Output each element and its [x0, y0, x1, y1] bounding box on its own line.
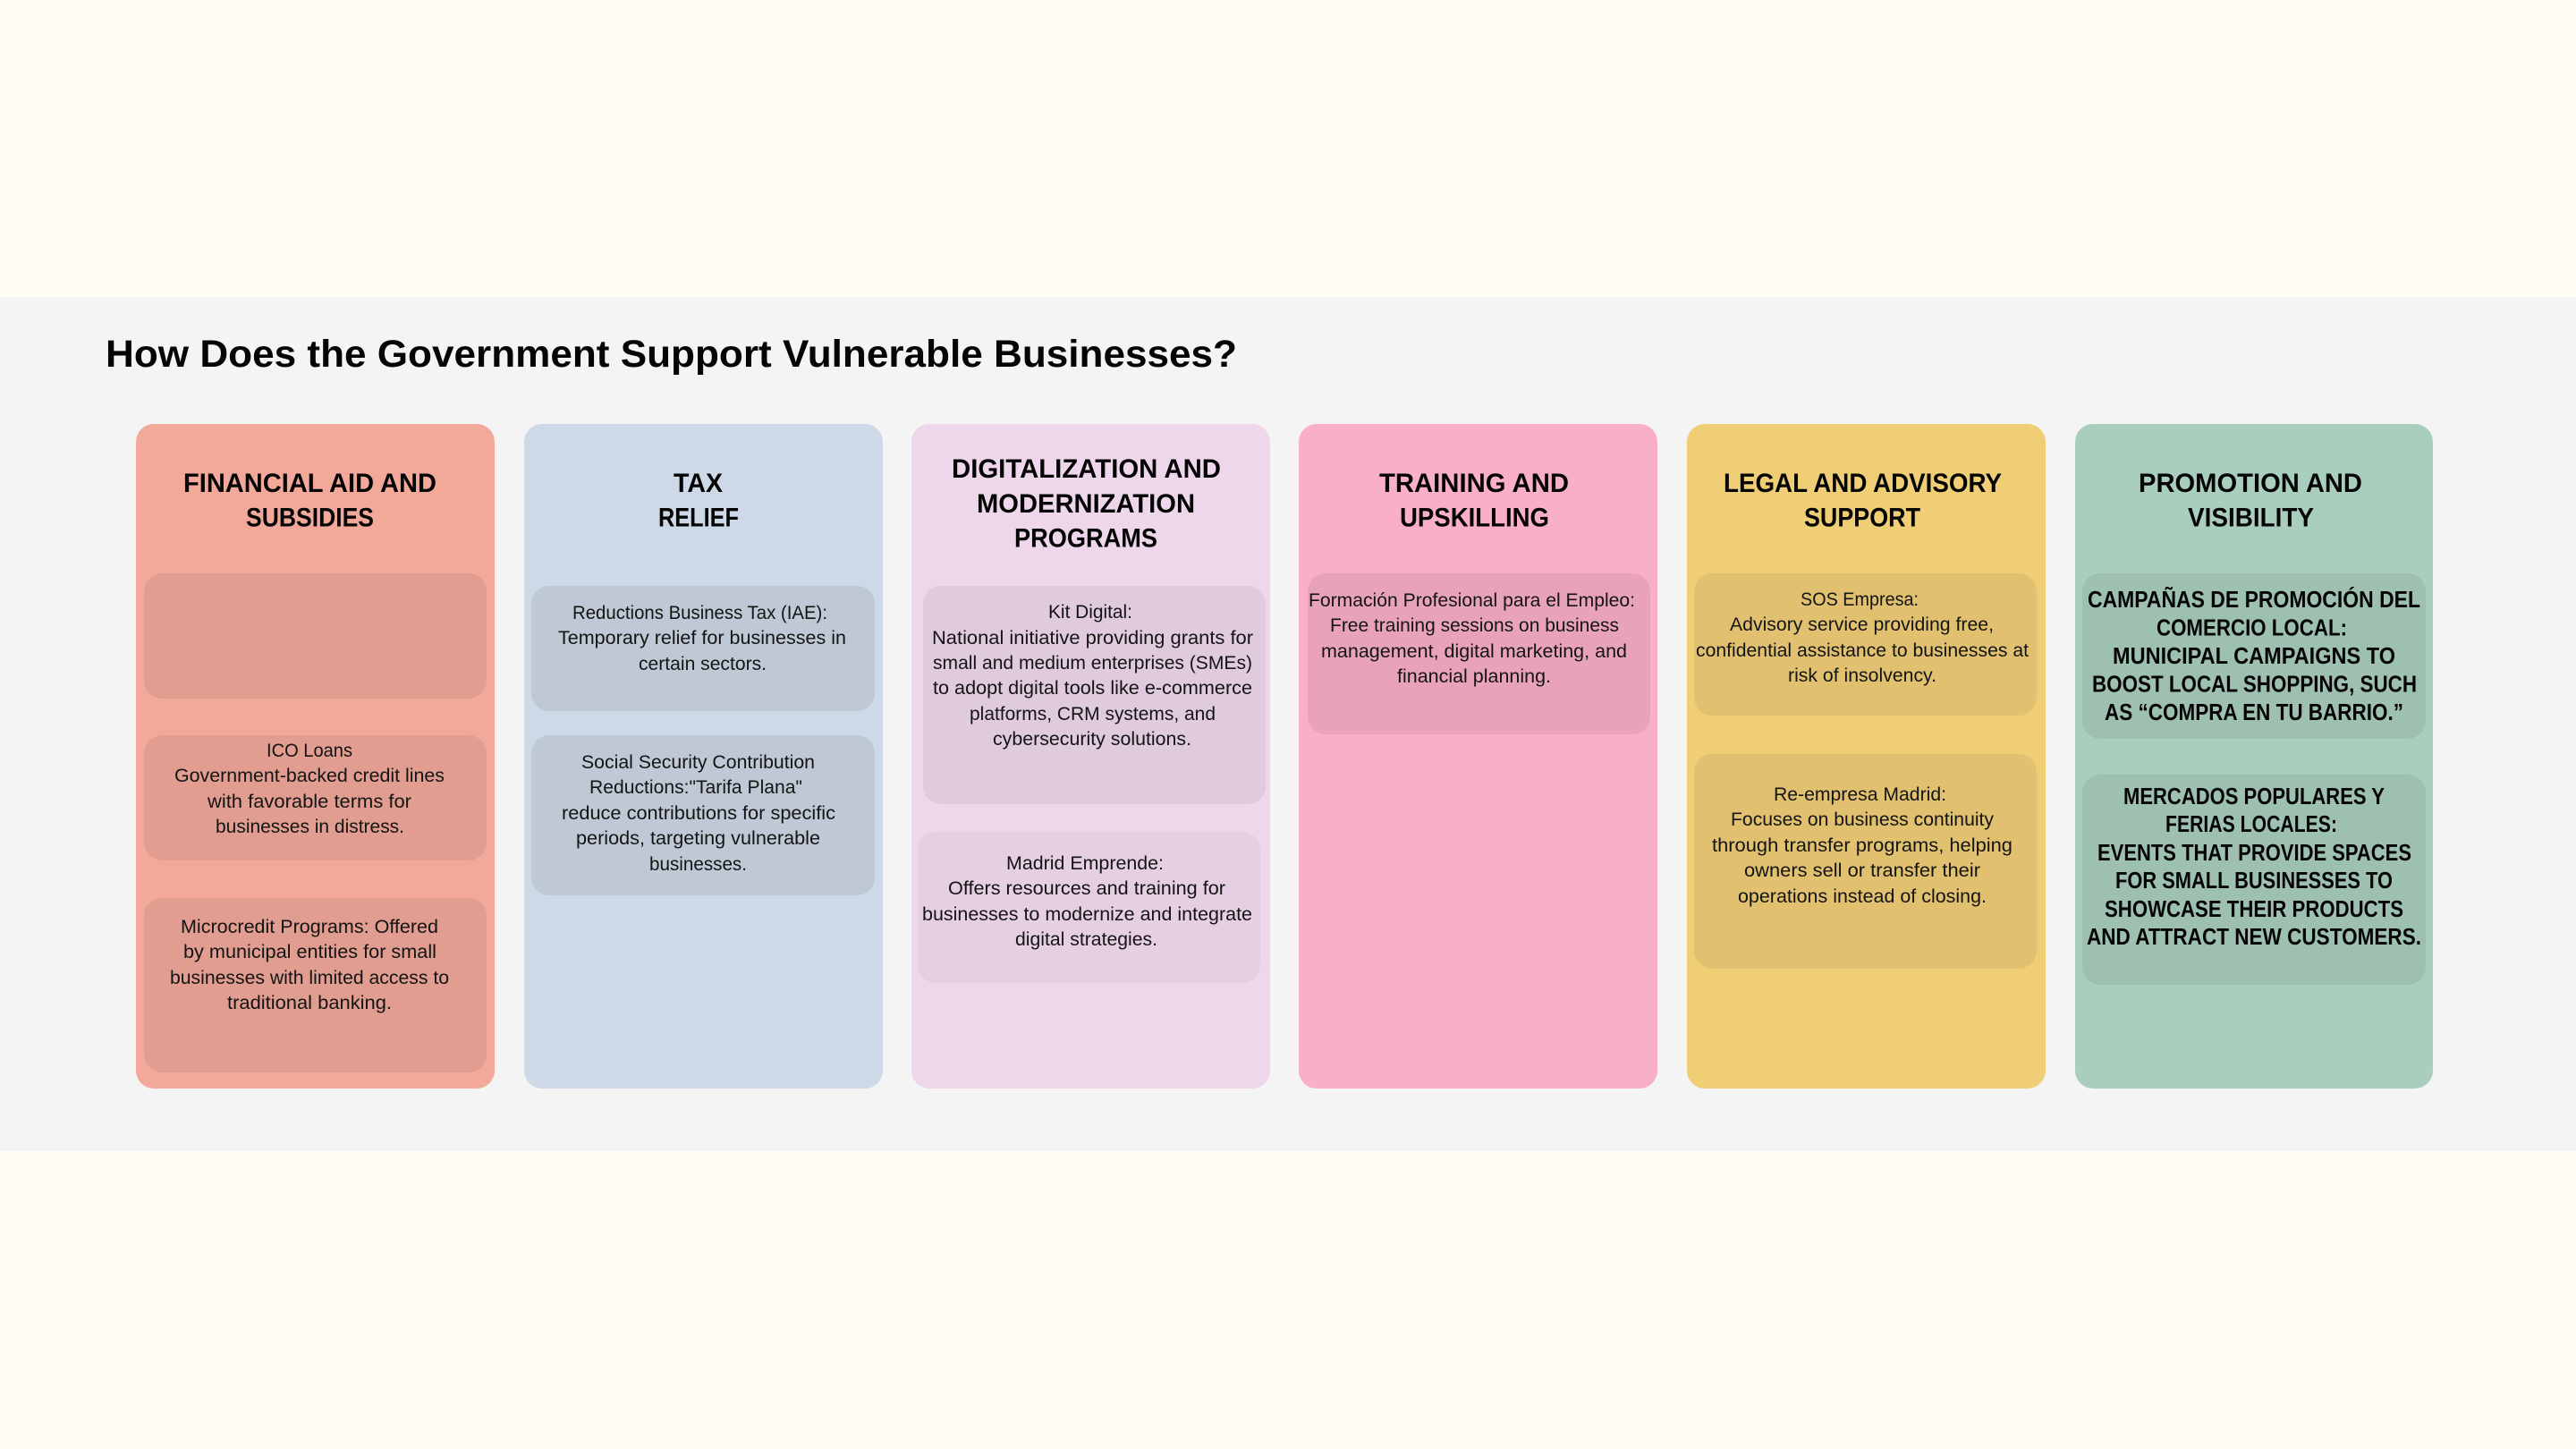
card: Formación Profesional para el Empleo: management, digital marketing, and: [1321, 640, 1627, 662]
card: Mercados populares: FERIAS LOCALES:: [2165, 812, 2337, 837]
card: Kit Digital: Kit Digital:: [1048, 601, 1132, 623]
card: Campañas de promoción: AS “COMPRA EN TU BARRIO.”: [2105, 700, 2403, 725]
card: Formación Profesional para el Empleo: Free training sessions on business: [1330, 614, 1619, 636]
panel: promotion and visibility: [2075, 424, 2433, 1089]
card: Mercados populares: AND ATTRACT NEW CUSTOMERS.: [2087, 925, 2421, 950]
heading: digitalization: DIGITALIZATION AND: [952, 454, 1221, 484]
heading: tax relief: TAX: [674, 469, 723, 498]
card: business tax reductions: Temporary relief for businesses in: [558, 627, 846, 648]
card: Mercados populares: FOR SMALL BUSINESSES TO: [2115, 869, 2393, 894]
card: Re-empresa Madrid: owners sell or transfer their: [1744, 860, 1980, 881]
card: Madrid Emprende: Offers resources and training for: [948, 877, 1225, 899]
card: microcredit programs: [144, 898, 487, 1072]
card: Mercados populares: EVENTS THAT PROVIDE SPACES: [2097, 841, 2411, 866]
card: microcredit programs: businesses with limited access to: [170, 967, 449, 988]
card: Madrid Emprende: digital strategies.: [1015, 928, 1157, 950]
card: Formación Profesional para el Empleo: financial planning.: [1397, 665, 1551, 687]
heading: financial aid: [183, 469, 436, 533]
heading: training: UPSKILLING: [1400, 503, 1549, 533]
empty card: [144, 573, 487, 699]
card: microcredit programs: by municipal entities for small: [183, 941, 436, 962]
card: ICO Loans: [144, 735, 487, 860]
title: How Does the Government Support Vulnerable Businesses?: [106, 333, 1237, 376]
heading: legal: SUPPORT: [1804, 503, 1920, 533]
card: microcredit programs: traditional banking.: [227, 992, 392, 1013]
card: social security contribution reductions: Social Security Contribution: [581, 751, 815, 773]
heading: financial aid: FINANCIAL AID AND: [183, 469, 436, 498]
card: Formación Profesional para el Empleo: [1308, 573, 1650, 734]
card: Kit Digital: small and medium enterprises (SMEs): [933, 652, 1252, 674]
card: Campañas de promoción: [2082, 573, 2426, 739]
card: Campañas de promoción: COMERCIO LOCAL:: [2157, 615, 2347, 640]
card: social security contribution reductions: businesses.: [649, 853, 747, 875]
panel: legal and advisory support: [1687, 424, 2046, 1089]
card: Campañas de promoción: MUNICIPAL CAMPAIGNS TO: [2113, 644, 2395, 669]
card: business tax reductions: Reductions Business Tax (IAE):: [572, 602, 827, 623]
heading: digitalization: MODERNIZATION: [977, 489, 1195, 519]
card: SOS Empresa: risk of insolvency.: [1788, 665, 1936, 686]
heading: training: [1379, 469, 1569, 533]
card: Mercados populares: SHOWCASE THEIR PRODUCTS: [2105, 897, 2403, 922]
heading: training: TRAINING AND: [1379, 469, 1569, 498]
card: SOS Empresa: [1694, 573, 2037, 716]
card: Kit Digital: cybersecurity solutions.: [993, 728, 1191, 750]
heading: promotion: VISIBILITY: [2188, 503, 2314, 533]
card: Re-empresa Madrid: Re-empresa Madrid:: [1774, 784, 1946, 805]
heading: tax relief: RELIEF: [658, 503, 739, 533]
card: Kit Digital: National initiative providing grants for: [932, 627, 1253, 648]
card: Re-empresa Madrid: through transfer programs, helping: [1712, 835, 2012, 856]
card: social security contribution reductions: periods, targeting vulnerable: [576, 827, 820, 849]
card: Kit Digital: to adopt digital tools like e-commerce: [933, 677, 1252, 699]
heading: digitalization: PROGRAMS: [1014, 524, 1157, 553]
panel: training and upskilling: [1299, 424, 1657, 1089]
card: ICO Loans: ICO Loans: [267, 740, 352, 761]
card: Madrid Emprende: [918, 832, 1260, 983]
card: SOS Empresa: Advisory service providing free,: [1730, 614, 1994, 635]
card: ICO Loans: with favorable terms for: [207, 791, 411, 812]
heading: legal: LEGAL AND ADVISORY: [1724, 469, 2002, 498]
heading: legal: [1724, 469, 2002, 533]
card: Mercados populares: [2082, 775, 2426, 985]
card: ICO Loans: businesses in distress.: [216, 816, 404, 837]
card: SOS Empresa: confidential assistance to businesses at: [1696, 640, 2029, 661]
panel: digitalization and modernization programs: [911, 424, 1270, 1089]
card: social security contribution reductions: Reductions:"Tarifa Plana": [589, 776, 802, 798]
card: ICO Loans: Government-backed credit lines: [174, 765, 445, 786]
card: business tax reductions: [531, 586, 875, 711]
card: social security contribution reductions: reduce contributions for specific: [562, 802, 835, 824]
panel: tax relief: [524, 424, 883, 1089]
card: Formación Profesional para el Empleo: Formación Profesional para el Empleo:: [1309, 589, 1635, 611]
panel: financial aid and subsidies: [136, 424, 495, 1089]
card: Re-empresa Madrid: [1694, 754, 2037, 969]
card: Campañas de promoción: CAMPAÑAS DE PROMOCIÓN DEL: [2088, 586, 2420, 613]
card: social security contribution reductions: [531, 735, 875, 895]
card: Mercados populares: MERCADOS POPULARES Y: [2123, 784, 2385, 809]
card: business tax reductions: certain sectors.: [639, 653, 767, 674]
card: microcredit programs: Microcredit Programs: Offered: [181, 916, 438, 937]
heading: digitalization: [952, 454, 1221, 553]
card: SOS Empresa: SOS Empresa:: [1801, 589, 1919, 610]
heading: promotion: PROMOTION AND: [2139, 469, 2362, 498]
heading: tax relief: [658, 469, 739, 533]
card: Madrid Emprende: businesses to modernize and integrate: [922, 903, 1252, 925]
card: Madrid Emprende: Madrid Emprende:: [1006, 852, 1164, 874]
card: Re-empresa Madrid: operations instead of closing.: [1738, 886, 1987, 907]
heading: promotion: [2139, 469, 2362, 533]
card: Kit Digital: platforms, CRM systems, and: [970, 703, 1216, 724]
heading: financial aid: SUBSIDIES: [246, 503, 374, 533]
card: Campañas de promoción: BOOST LOCAL SHOPPING, SUCH: [2092, 673, 2417, 698]
card: Kit Digital: [923, 586, 1266, 804]
content band background: [0, 297, 2576, 1151]
card: Re-empresa Madrid: Focuses on business continuity: [1731, 809, 1994, 830]
